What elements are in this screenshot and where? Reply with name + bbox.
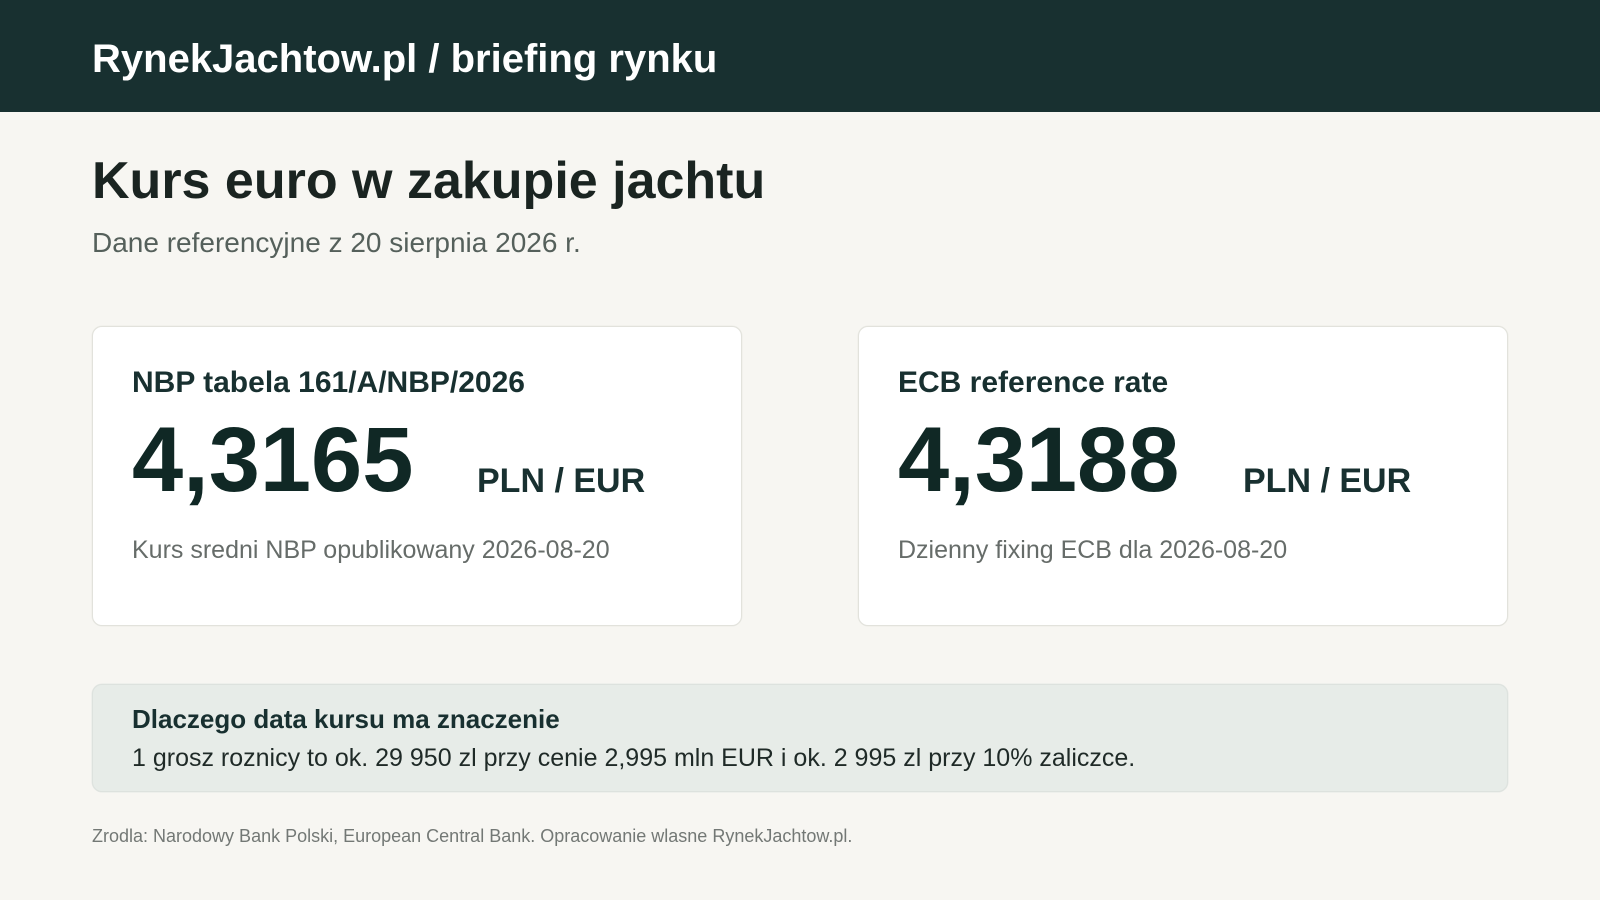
callout body: 1 grosz roznicy to ok. 29 950 zl przy cenie 2,995 mln EUR i ok. 2 995 zl przy 10% zaliczce.: [132, 744, 1135, 772]
callout heading: Dlaczego data kursu ma znaczenie: [132, 704, 560, 734]
NBP card note: Kurs sredni NBP opublikowany 2026-08-20: [132, 536, 610, 564]
ECB rate unit: PLN / EUR: [1243, 462, 1411, 500]
title: Kurs euro w zakupie jachtu: [92, 152, 765, 210]
panel: NBP rate card: [92, 326, 742, 626]
NBP rate unit: PLN / EUR: [477, 462, 645, 500]
ECB card heading: ECB reference rate: [898, 366, 1168, 399]
NBP rate value: 4,3165: [132, 409, 413, 511]
ECB rate value: 4,3188: [898, 409, 1179, 511]
panel: ECB rate card: [858, 326, 1508, 626]
callout: why the rate date matters: [92, 684, 1508, 792]
header brand text: RynekJachtow.pl / briefing rynku: [92, 37, 717, 81]
header bar: [0, 0, 1600, 112]
NBP card heading: NBP tabela 161/A/NBP/2026: [132, 366, 525, 399]
subtitle: Dane referencyjne z 20 sierpnia 2026 r.: [92, 227, 581, 258]
ECB card note: Dzienny fixing ECB dla 2026-08-20: [898, 536, 1287, 564]
source note: Zrodla: Narodowy Bank Polski, European Central Bank. Opracowanie wlasne RynekJachtow.pl.: [92, 826, 852, 846]
